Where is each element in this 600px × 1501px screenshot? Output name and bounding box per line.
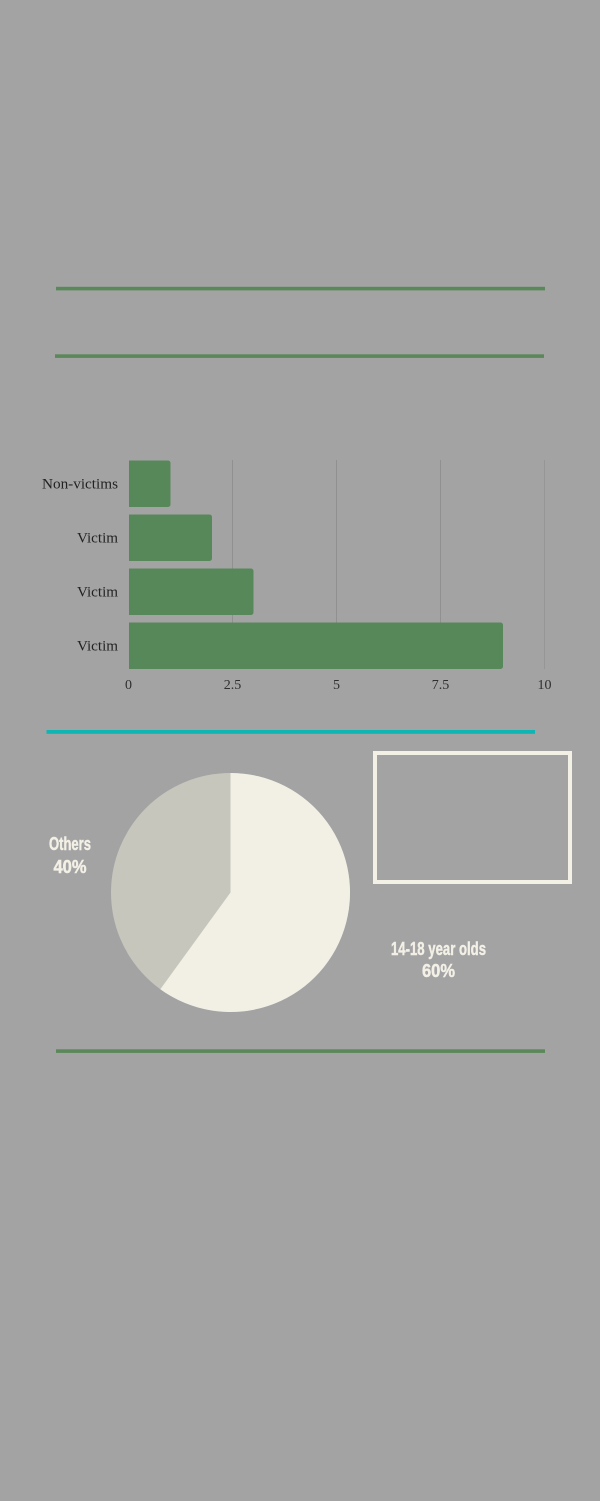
bar: victim, value 3 bbox=[129, 568, 254, 615]
axis tick labels bbox=[125, 678, 552, 693]
label: others 40%: 40% bbox=[54, 857, 86, 877]
label: 14-18 year olds 60%: 14-18 year olds bbox=[391, 939, 486, 959]
axis tick labels: 2.5 bbox=[224, 678, 241, 693]
category label: non-victims: Non-victims bbox=[42, 476, 118, 492]
label: others 40%: Others bbox=[49, 834, 91, 854]
axis tick labels: 10 bbox=[538, 678, 552, 693]
bar: victim, value 2 bbox=[129, 514, 212, 561]
pie chart bbox=[111, 773, 350, 1012]
axis tick labels: 7.5 bbox=[432, 678, 449, 693]
pie slice: 14-18 year olds 60% bbox=[160, 773, 350, 1012]
category label: victim 2: Victim bbox=[77, 584, 119, 600]
label: 14-18 year olds 60%: 60% bbox=[422, 961, 455, 981]
bar chart bbox=[42, 460, 552, 693]
bar: non-victims, value 1 bbox=[129, 460, 170, 507]
label: 14-18 year olds 60% bbox=[391, 939, 486, 981]
bar: victim, value 9 bbox=[129, 622, 503, 669]
label: others 40% bbox=[49, 834, 91, 877]
category label: victim 1: Victim bbox=[77, 530, 119, 546]
category label: victim 3: Victim bbox=[77, 638, 119, 654]
axis tick labels: 5 bbox=[333, 678, 340, 693]
empty outlined box bbox=[375, 753, 570, 882]
axis tick labels: 0 bbox=[125, 678, 132, 693]
